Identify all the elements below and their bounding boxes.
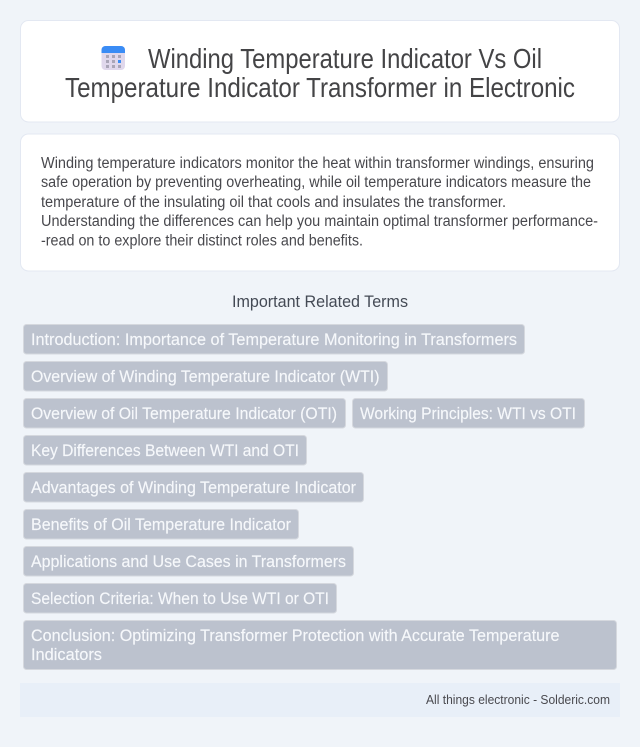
tag: conclusion: Indicators [31,645,102,664]
tag: introduction [24,324,524,354]
title [65,43,575,103]
tag: introduction: Introduction: Importance of Temperature Monitoring in Transformers [31,330,517,349]
text block: description: safe operation by preventing overheating, while oil temperature indicators measure the [41,174,591,191]
text block: description: Understanding the differences can help you maintain optimal transformer performance- [41,213,598,230]
tag: selection criteria [24,584,336,613]
tag: overview WTI [24,362,388,391]
text block: description: Winding temperature indicators monitor the heat within transformer windings, ensuring [41,155,594,172]
tag: benefits [24,510,298,539]
panel: title header [20,20,620,122]
text block: description: temperature of the insulating oil that cools and insulates the transformer. [41,194,506,211]
tag: working principles: Working Principles: WTI vs OTI [360,404,576,423]
tag: selection criteria: Selection Criteria: When to Use WTI or OTI [31,589,329,608]
tag: applications [24,546,354,576]
tag: overview WTI: Overview of Winding Temperature Indicator (WTI) [31,367,380,386]
tag: advantages [24,472,364,502]
tag: key differences [24,436,306,465]
title: Winding Temperature Indicator Vs Oil [148,43,542,74]
tag: conclusion: Conclusion: Optimizing Transformer Protection with Accurate Temperature [31,626,560,645]
footer: All things electronic - Solderic.com [426,693,610,707]
tag: overview OTI [24,398,346,428]
panel: description [20,134,620,271]
tag: applications: Applications and Use Cases in Transformers [31,552,346,571]
icon: calendar [102,46,125,70]
tag: advantages: Advantages of Winding Temperature Indicator [31,478,356,497]
text block: description: -read on to explore their distinct roles and benefits. [41,232,363,250]
tag: working principles [352,398,584,428]
heading: related terms: Important Related Terms [232,292,408,311]
tag: overview OTI: Overview of Oil Temperature Indicator (OTI) [31,404,337,423]
tag: key differences: Key Differences Between WTI and OTI [31,441,299,460]
text block: description [41,155,598,250]
title: Temperature Indicator Transformer in Electronic [65,72,575,103]
tag: benefits: Benefits of Oil Temperature Indicator [31,515,291,534]
footer [20,683,620,717]
tag: conclusion [24,620,616,670]
